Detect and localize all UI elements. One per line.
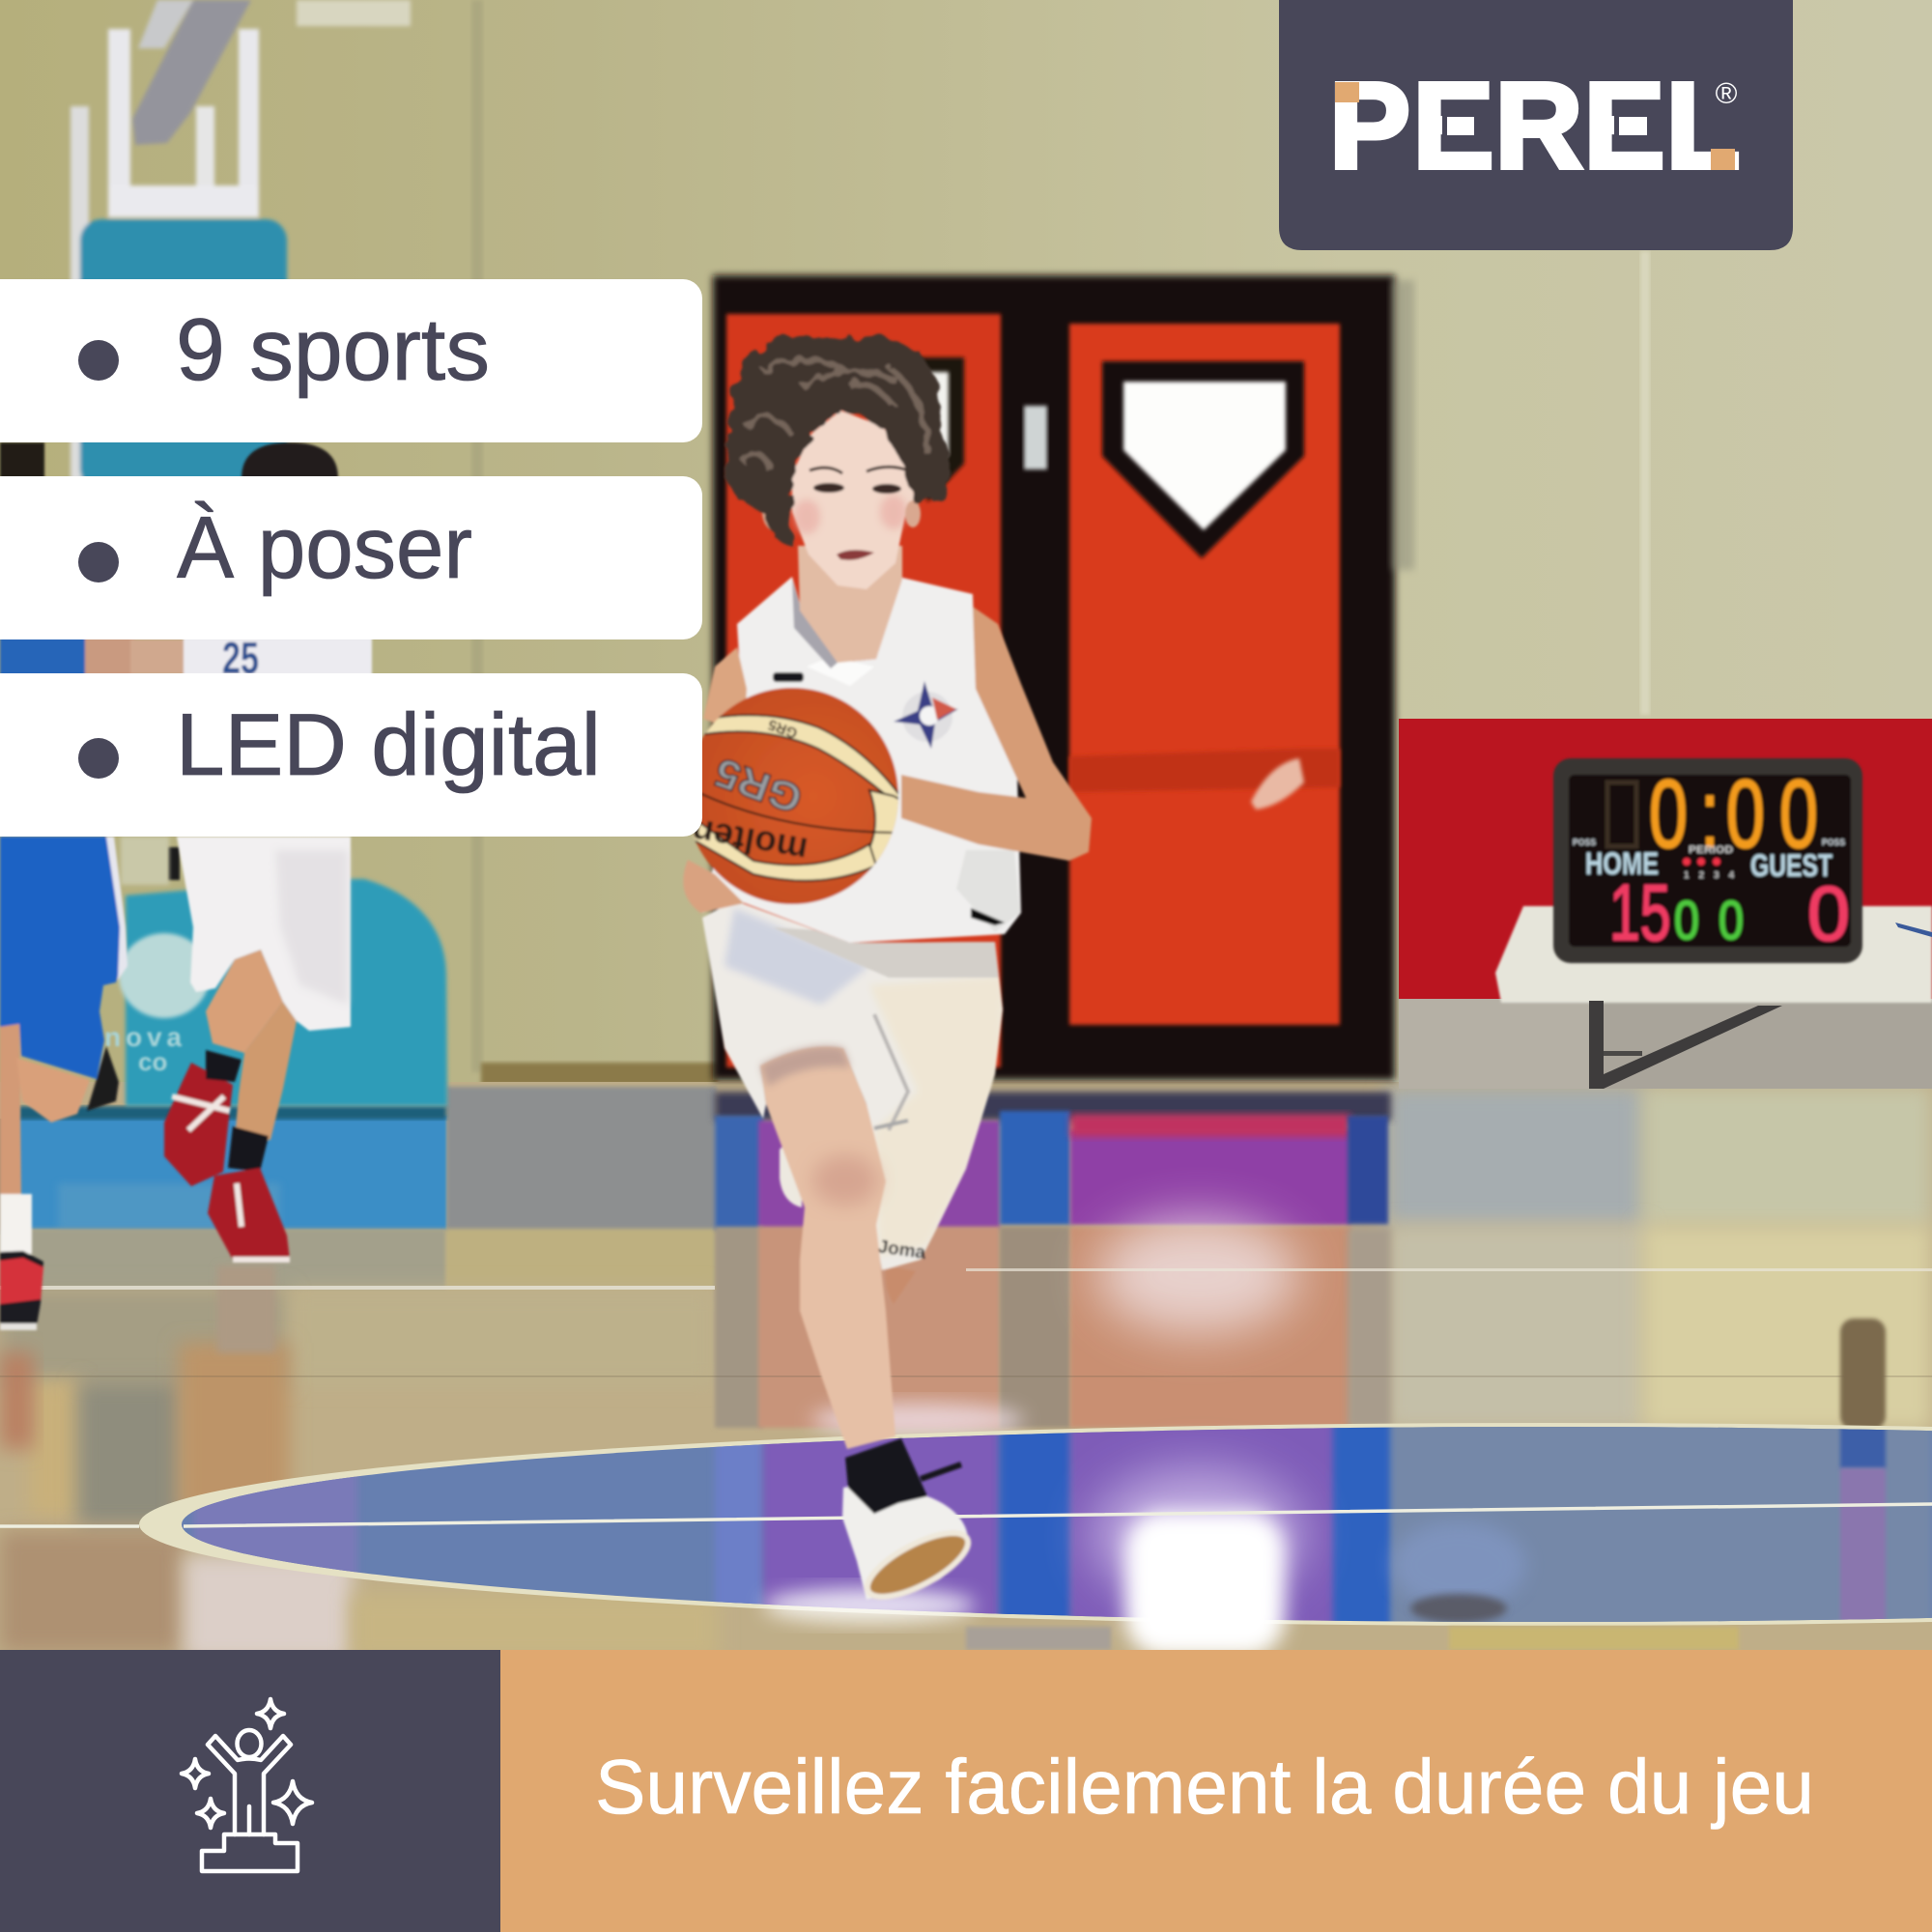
- center circle on court: [0, 1420, 1932, 1657]
- home and guest labels: GUEST: [1750, 848, 1833, 883]
- PEREL wordmark: PEREL: [1329, 58, 1740, 193]
- gym wall: [0, 0, 1932, 1092]
- curly hair: [724, 335, 952, 549]
- home and guest labels: PERIOD: [1689, 844, 1733, 856]
- feature: À poser: À poser: [177, 499, 472, 597]
- feature: LED digital: [0, 673, 702, 837]
- basketball: GR5: [766, 716, 800, 741]
- score digits: 15: [1609, 868, 1671, 958]
- home and guest labels: [1573, 838, 1845, 883]
- background players: [0, 442, 372, 1330]
- feature: 9 sports: [0, 279, 702, 442]
- neck and face: [762, 411, 921, 663]
- teal wall pad: nova: [104, 1022, 182, 1052]
- scoreboard inset photo: [1399, 719, 1932, 1089]
- player heads and jerseys: 25: [222, 633, 259, 683]
- main player: [676, 335, 1092, 1609]
- score digits: 0: [1674, 890, 1699, 952]
- time display: 0:00: [1649, 760, 1818, 868]
- team badge: [894, 681, 958, 749]
- white-shorts player: [164, 837, 351, 1260]
- basketball: molten: [689, 811, 810, 870]
- feature: 9 sports: 9 sports: [176, 301, 490, 399]
- teal wall pad: co: [138, 1047, 167, 1076]
- basketball: [676, 688, 904, 904]
- feature: LED digital: LED digital: [176, 696, 601, 794]
- court floor: [0, 1082, 1932, 1662]
- home and guest labels: POSS: [1822, 838, 1845, 847]
- bottom banner: [0, 1650, 1932, 1932]
- feature list: [0, 279, 702, 837]
- scoreboard device: [1553, 758, 1862, 963]
- back foot and shorts: Joma: [876, 1236, 927, 1264]
- PEREL wordmark: ®: [1716, 76, 1738, 110]
- caption panel: [500, 1650, 1932, 1932]
- icon panel: [0, 1650, 500, 1932]
- folding table: [1495, 906, 1932, 1089]
- home and guest labels: POSS: [1573, 838, 1596, 847]
- blue-shorts player: [0, 837, 128, 1330]
- score digits: [1609, 868, 1850, 958]
- basketball stand: [71, 0, 411, 493]
- jersey: [702, 577, 1021, 943]
- home and guest labels: HOME: [1585, 846, 1659, 881]
- basketball: GR5: [709, 750, 808, 822]
- shoe: [842, 1438, 977, 1609]
- player arms: [683, 607, 1092, 913]
- red wall and grey base: [1399, 719, 1932, 1089]
- feature: À poser: [0, 476, 702, 639]
- icon: winner on podium with stars: [182, 1699, 312, 1871]
- score digits: 0: [1719, 890, 1744, 952]
- player heads and jerseys: [0, 442, 372, 683]
- period indicator: [1683, 858, 1734, 881]
- logo panel: [1279, 0, 1793, 250]
- door frame and red doors: [713, 275, 1414, 1080]
- back foot and shorts: [702, 900, 1005, 1304]
- period indicator: 1 2 3 4: [1684, 870, 1734, 881]
- teal wall pad: [104, 837, 447, 1106]
- score digits: 0: [1807, 870, 1850, 956]
- leg: [760, 1046, 895, 1449]
- caption panel: Surveillez facilement la durée du jeu: [595, 1744, 1814, 1830]
